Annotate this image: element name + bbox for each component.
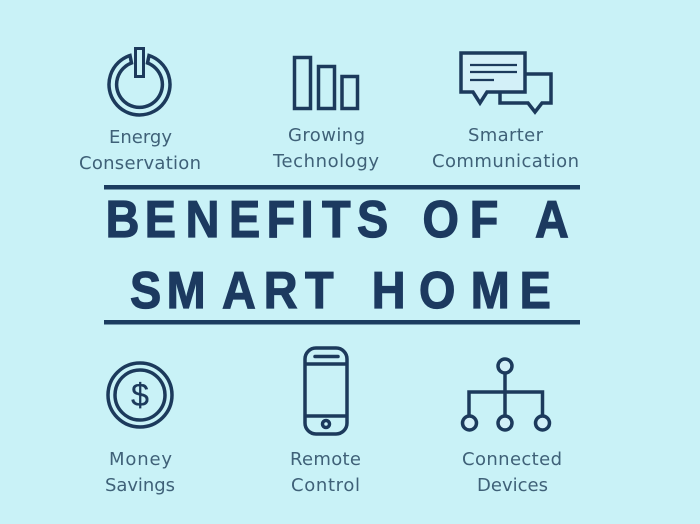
title: benefits of a smart home: SMART HOME [130,262,551,320]
label: growing technology: Growing [288,125,365,146]
label: connected devices: Devices [477,475,548,496]
label: energy conservation: Conservation [79,153,201,174]
label: remote control: Control [291,475,360,496]
icon: dollar coin: $ [131,377,149,413]
label: growing technology: Technology [272,151,379,172]
panel: remote control [290,348,361,496]
label: energy conservation: Energy [109,127,172,148]
label: money savings: Savings [105,475,175,496]
top rule [104,185,580,190]
title: benefits of a smart home: BENEFITS OF A [106,191,569,249]
icon: speech bubbles [461,53,551,112]
icon: bar chart [294,58,358,108]
panel: smarter communication [432,53,579,172]
label: money savings [105,449,175,496]
title block [104,185,580,324]
bottom rule [104,320,580,324]
label: growing technology [272,125,379,172]
label: money savings: Money [109,449,172,470]
panel: growing technology [272,58,379,172]
label: connected devices [462,449,562,496]
icon: network tree [462,359,550,430]
title: benefits of a smart home [106,191,569,320]
label: connected devices: Connected [462,449,562,470]
label: remote control [290,449,361,496]
icon: smartphone [305,348,347,434]
label: smarter communication [432,125,579,172]
panel: energy conservation [79,48,201,174]
panel: money savings [105,363,175,496]
label: remote control: Remote [290,449,361,470]
label: smarter communication: Smarter [468,125,544,146]
label: energy conservation [79,127,201,174]
panel: connected devices [462,359,562,496]
label: smarter communication: Communication [432,151,579,172]
icon: power button [109,48,170,115]
